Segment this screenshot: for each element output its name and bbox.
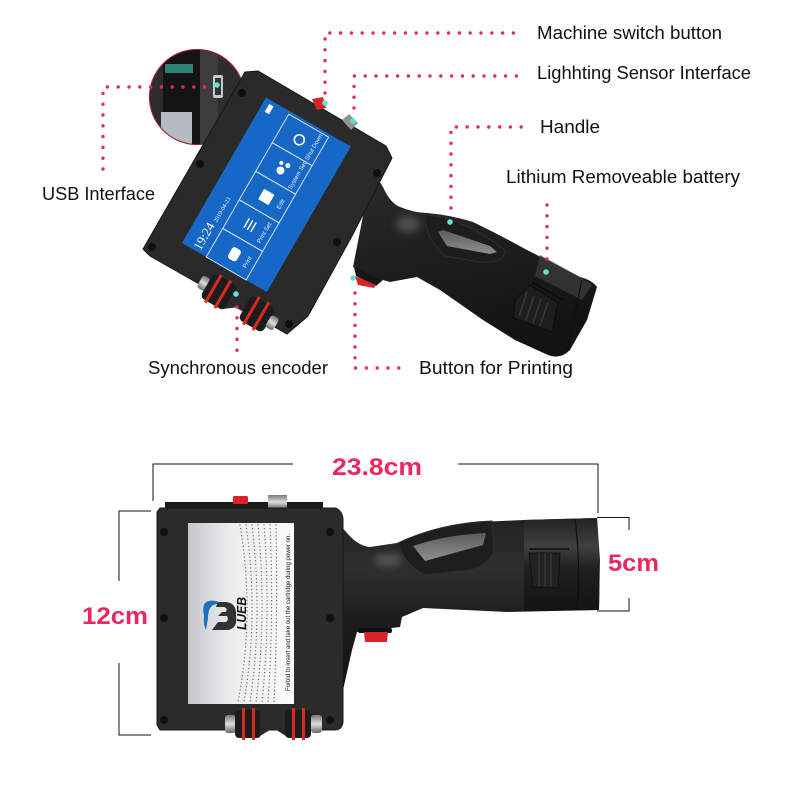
- grip pad: [425, 215, 505, 262]
- time: 19:24 2019-04-23: [190, 193, 233, 253]
- printer body: [143, 71, 392, 334]
- brand name: LUEB: [234, 597, 249, 630]
- rear print button: [358, 628, 392, 642]
- dimension values: 5cm: [608, 550, 659, 577]
- rear body: [157, 508, 343, 730]
- dimension bracket: height: [119, 511, 151, 735]
- sensor connector: [342, 114, 358, 130]
- callout labels: [42, 23, 751, 378]
- icon: USB inset circle: [150, 50, 245, 150]
- top edge strip: [165, 502, 323, 510]
- top connector: [268, 495, 287, 509]
- dotted leader: encoder: [235, 307, 239, 352]
- dotted leader: machine switch button: [325, 33, 524, 93]
- callout labels: Lighhting Sensor Interface: [537, 63, 751, 83]
- tile labels: Edit: [276, 198, 287, 211]
- button: machine switch: [312, 97, 326, 110]
- dotted leader: battery: [545, 205, 549, 260]
- callout labels: Button for Printing: [419, 358, 573, 378]
- callout labels: Synchronous encoder: [148, 358, 328, 378]
- top red button: [233, 496, 248, 504]
- touch screen: [182, 98, 351, 292]
- callout labels: Handle: [540, 117, 600, 137]
- dimension bracket: width: [153, 464, 598, 513]
- tile labels: Shut Down: [305, 133, 324, 162]
- tile labels: System Set: [288, 161, 308, 191]
- halftone dot arcs: [238, 525, 277, 702]
- silver label: [188, 523, 294, 704]
- dotted leader: print button: [355, 293, 406, 368]
- callout labels: Lithium Removeable battery: [506, 167, 740, 187]
- logo mark: [203, 601, 236, 630]
- handle highlight: [396, 216, 420, 232]
- body screws: [148, 89, 381, 328]
- dimension values: 12cm: [82, 603, 148, 630]
- tile labels: [242, 133, 324, 269]
- battery indicator: [265, 104, 274, 114]
- cyan marker dots: [214, 82, 549, 297]
- dimension bracket: battery diameter: [597, 518, 629, 611]
- tile labels: Print: [242, 256, 254, 269]
- rear battery: [524, 518, 599, 611]
- tile labels: Print Set: [257, 221, 274, 245]
- dotted leader: USB: [103, 87, 208, 169]
- rear encoder wheels: [225, 708, 322, 740]
- callout labels: Machine switch button: [537, 23, 722, 43]
- panel: dimensions, back view: [82, 454, 659, 740]
- button: printing trigger: [354, 267, 383, 288]
- printer handle: [353, 170, 597, 357]
- menu tiles: [206, 114, 329, 280]
- panel: annotated printer, front view: [42, 23, 751, 378]
- dimension values: 23.8cm: [332, 454, 422, 481]
- tile icons: [225, 132, 307, 262]
- rear handle: [340, 518, 600, 690]
- rear neck highlight: [374, 554, 402, 566]
- rear grip pad: [398, 521, 494, 575]
- synchronous encoder wheels: [192, 267, 284, 339]
- dotted leader: lighting sensor: [354, 76, 524, 108]
- rear screws: [160, 528, 334, 724]
- callout labels: USB Interface: [42, 184, 155, 204]
- dotted leader: handle: [451, 127, 524, 208]
- dimension values: [82, 454, 659, 630]
- battery detail: [513, 255, 592, 350]
- warning text: Forbid to insert and take out the cartridge during power on.: [285, 534, 292, 691]
